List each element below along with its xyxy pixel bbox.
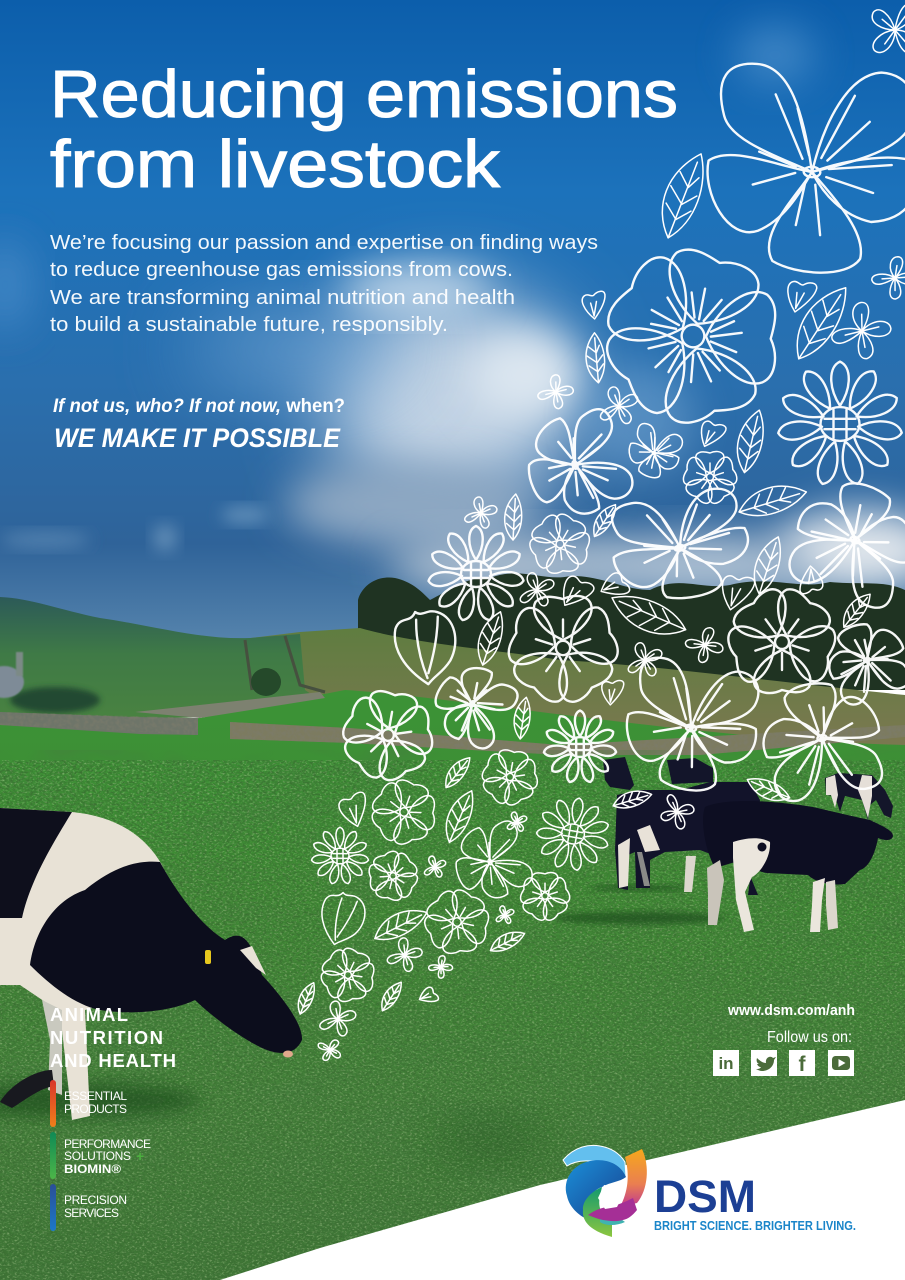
flower right edge — [780, 468, 905, 614]
performance solutions and biomin: BIOMIN® — [64, 1162, 121, 1176]
icon: youtube — [828, 1050, 854, 1076]
precision services — [50, 1184, 127, 1231]
leaves — [294, 147, 875, 1016]
website and follow text — [727, 1003, 855, 1046]
essential products: ESSENTIAL — [64, 1089, 127, 1103]
clouds — [0, 25, 905, 595]
heading — [50, 57, 678, 202]
flower cloud: large flowers — [332, 61, 905, 805]
daisy near trees — [428, 526, 524, 622]
animal nutrition and health heading: ANIMAL — [50, 1004, 128, 1025]
distant cows — [603, 757, 893, 820]
middle cow — [615, 782, 760, 895]
tagline — [53, 396, 345, 453]
tagline: WE MAKE IT POSSIBLE — [54, 423, 341, 453]
flower far right — [818, 613, 905, 709]
DSM slogan: BRIGHT SCIENCE. BRIGHTER LIVING. — [654, 1219, 856, 1233]
tulip — [392, 607, 461, 688]
icon: linkedin: in — [718, 1054, 734, 1073]
stone walls — [0, 692, 905, 755]
DSM wordmark: DSM — [654, 1171, 756, 1222]
precision services: PRECISION — [64, 1193, 127, 1207]
precision services: SERVICES — [64, 1206, 119, 1220]
wide flower centre — [605, 484, 756, 609]
cow shadows — [0, 885, 725, 1160]
essential products: PRODUCTS — [64, 1102, 127, 1116]
midground hill — [235, 628, 905, 745]
grass mottling and texture — [0, 750, 905, 1280]
bright flower — [617, 654, 767, 800]
tree line — [358, 573, 905, 690]
icon: linkedin — [713, 1050, 739, 1076]
flower by wall 3 — [543, 711, 617, 783]
flower cloud: small flowers and leaves — [294, 0, 905, 1065]
icon: twitter — [751, 1050, 777, 1076]
intro text: We’re focusing our passion and expertise on finding ways — [50, 232, 598, 254]
left hill — [0, 597, 320, 725]
website and follow text: www.dsm.com/anh — [727, 1003, 855, 1019]
flower by wall 2 — [422, 654, 523, 755]
heading: from livestock — [50, 127, 501, 202]
flower near trees — [504, 596, 621, 707]
flower left of centre — [514, 402, 638, 528]
white footer wedge — [220, 1100, 905, 1280]
essential products — [50, 1080, 127, 1127]
performance solutions and biomin: PERFORMANCE — [64, 1137, 151, 1151]
daisy upper right — [777, 362, 903, 486]
mid flowers — [310, 746, 616, 1065]
green field — [0, 690, 905, 1280]
grazing cow in foreground — [0, 808, 302, 1120]
website and follow text: Follow us on: — [767, 1029, 852, 1046]
intro text: We are transforming animal nutrition and health — [50, 287, 515, 309]
hearts and petals — [337, 279, 824, 1008]
hillside wall and bushes — [0, 636, 325, 713]
social icons — [713, 1050, 854, 1076]
upper small flowers — [464, 0, 905, 831]
performance solutions and biomin — [50, 1132, 151, 1179]
icon: facebook: f — [798, 1053, 806, 1076]
sky background — [0, 0, 905, 640]
DSM logo mark — [563, 1145, 647, 1237]
icon: facebook — [789, 1050, 815, 1076]
animal nutrition and health heading — [50, 1004, 176, 1071]
ringed flower — [701, 567, 858, 723]
front cow on right — [703, 801, 893, 932]
bright flower right — [754, 674, 889, 805]
intro text — [50, 232, 598, 336]
animal nutrition and health heading: AND HEALTH — [50, 1050, 176, 1071]
performance solutions and biomin: + — [136, 1148, 144, 1164]
big flower top right — [701, 61, 905, 279]
intro text: to reduce greenhouse gas emissions from cows. — [50, 259, 513, 281]
intro text: to build a sustainable future, responsibly. — [50, 314, 448, 336]
animal nutrition and health heading: NUTRITION — [50, 1027, 163, 1048]
tagline: If not us, who? If not now, when? — [53, 396, 345, 417]
heading: Reducing emissions — [50, 57, 678, 132]
flower by wall — [332, 684, 443, 791]
flower upper middle — [574, 226, 808, 456]
performance solutions and biomin: SOLUTIONS — [64, 1149, 131, 1163]
